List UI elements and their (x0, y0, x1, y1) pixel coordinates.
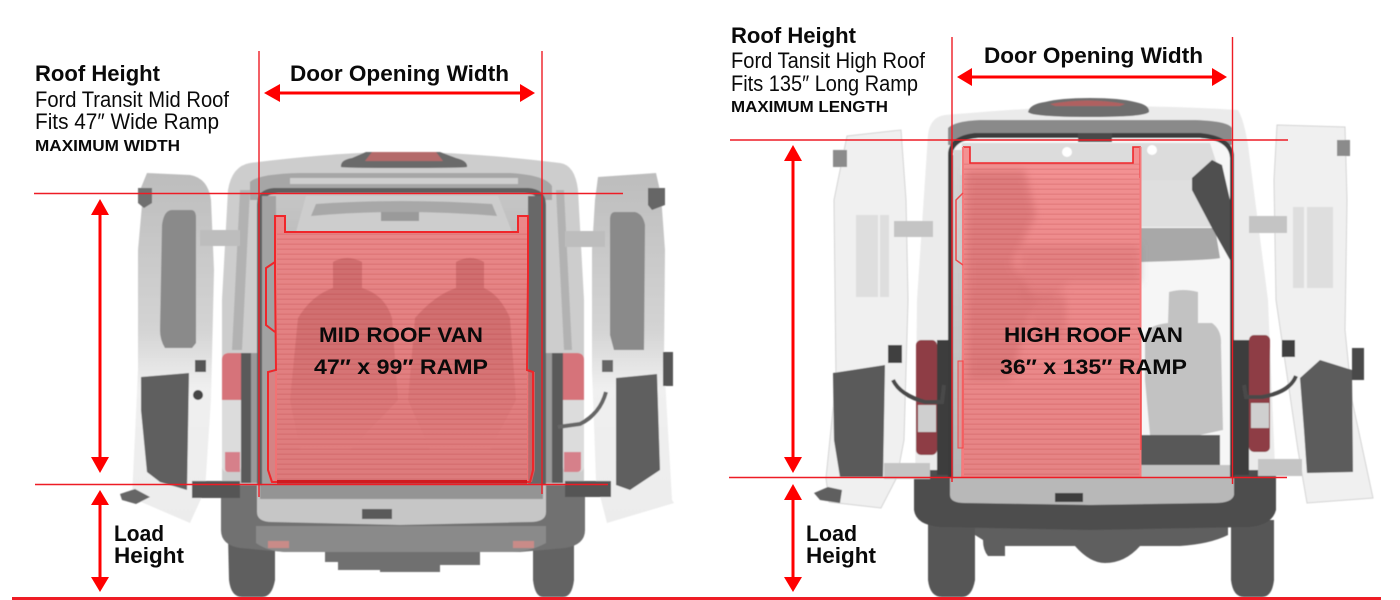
brake light (1028, 98, 1149, 117)
left tail light (916, 340, 937, 455)
left lens lower (225, 452, 240, 472)
body side stripe right (556, 190, 572, 350)
rear shelf (296, 196, 512, 232)
right door latch (648, 188, 665, 210)
load height guide (729, 476, 1287, 478)
door right guide (541, 51, 543, 494)
text: ramp fit: Fits 135″ Long Ramp (731, 71, 918, 96)
right lens white (1251, 403, 1269, 428)
left hinge bottom (192, 481, 240, 498)
heading: door opening width: Door Opening Width (984, 43, 1203, 68)
left door step (120, 489, 150, 504)
ceiling (960, 143, 1222, 180)
right tail light (563, 353, 584, 472)
heading: door opening width: Door Opening Width (290, 61, 509, 86)
sill plate (950, 478, 1234, 505)
left door (132, 173, 214, 523)
brake lens (1050, 100, 1125, 106)
roof height guide (730, 139, 1288, 141)
heading: roof height: Roof Height (731, 23, 857, 48)
left door lower panel (141, 373, 189, 490)
right door (1274, 125, 1373, 503)
right door window (610, 212, 645, 350)
roof height guide (34, 192, 623, 194)
left seam light (251, 353, 257, 483)
right hinge bottom (1258, 459, 1302, 476)
rear bumper (221, 485, 585, 552)
left hinge bottom (884, 463, 930, 479)
text: van model: Ford Tansit High Roof (731, 48, 926, 73)
passenger seat (1145, 290, 1223, 435)
interior backing (262, 193, 541, 485)
license light (362, 509, 392, 519)
right door handle (1352, 348, 1364, 380)
door frame band (250, 173, 552, 200)
label: load height: Load (806, 521, 857, 546)
left strap (893, 380, 944, 402)
brake lens (365, 152, 443, 161)
text: maximum length: MAXIMUM LENGTH (731, 99, 888, 116)
door frame band (948, 120, 1232, 145)
ceiling light 1 (1062, 147, 1072, 157)
left door panels (856, 215, 889, 297)
upper-left shadow (966, 170, 1036, 380)
door left guide (951, 37, 953, 482)
reflector right (513, 541, 534, 548)
label: ramp size: 36″ x 135″ RAMP (1000, 355, 1187, 379)
left rail (958, 361, 963, 448)
label: mid roof van: MID ROOF VAN (319, 323, 483, 347)
right door handle (663, 352, 673, 386)
right strap (1244, 376, 1296, 397)
arrow: roof height (784, 145, 802, 473)
arrow: door opening width (264, 84, 535, 102)
ceiling light 2 (1147, 145, 1157, 155)
right wheel (1231, 520, 1274, 597)
right seam (1234, 340, 1249, 475)
label: load height: Height (806, 543, 877, 568)
right hinge top (565, 231, 605, 247)
vents (381, 212, 419, 221)
label: load height: Load (114, 521, 164, 546)
ramp left edge (962, 147, 964, 477)
left wheel (228, 535, 275, 597)
frame highlight (290, 178, 518, 184)
underbody (975, 525, 1228, 563)
panel: high roof van diagram (729, 23, 1373, 597)
left door latch (138, 188, 152, 208)
cab floor (1140, 435, 1220, 465)
right door lower panel (1300, 360, 1353, 473)
van body (915, 106, 1276, 490)
interior left backing (953, 150, 1140, 478)
left door strap mount (193, 390, 203, 400)
door opening (948, 133, 1234, 478)
left hinge top (894, 221, 933, 237)
right pillar shadow (528, 196, 542, 484)
right door switch (602, 360, 613, 372)
right lens lower (564, 452, 581, 472)
right wheel (533, 535, 574, 597)
text: maximum width: MAXIMUM WIDTH (35, 138, 180, 155)
door right guide (1232, 37, 1234, 484)
ramp slats (963, 163, 1140, 475)
right dark seam (552, 353, 563, 483)
right hinge bottom (565, 481, 611, 497)
left door window (160, 210, 196, 348)
left wheel (928, 520, 975, 597)
right tail light (1249, 335, 1270, 452)
right door panels (1293, 207, 1333, 288)
guide lines: door opening and heights (34, 51, 623, 497)
right hinge top (1249, 216, 1287, 233)
body side stripe left (232, 190, 250, 350)
shadows behind ramp (966, 170, 1140, 380)
dark cabinet (1192, 160, 1230, 260)
left door switch (195, 360, 206, 372)
ground line (12, 597, 1381, 600)
ramp bottom edge (277, 480, 527, 484)
left door (826, 130, 908, 508)
label: ramp size: 47″ x 99″ RAMP (314, 355, 488, 379)
left hinge top (200, 230, 240, 246)
headrest shadow (1032, 295, 1066, 340)
label: high roof van: HIGH ROOF VAN (1004, 323, 1183, 347)
ramp panel (275, 216, 528, 482)
ceiling bracket (1078, 133, 1112, 142)
left seat (290, 258, 398, 450)
arrow: load height (784, 484, 802, 592)
load height guide (35, 484, 608, 486)
ramp: high roof (956, 147, 1141, 477)
van body (222, 152, 584, 490)
right seat (408, 258, 516, 450)
door opening (257, 188, 546, 485)
door strap (558, 392, 606, 427)
brake light (341, 152, 467, 168)
text: ramp fit: Fits 47″ Wide Ramp (35, 109, 219, 134)
sill tread (260, 485, 543, 499)
right door switch (1282, 340, 1295, 357)
left dark seam (241, 353, 251, 483)
left pillar (262, 196, 276, 484)
right door (592, 173, 674, 523)
panel: mid roof van diagram (34, 51, 674, 597)
lower step (256, 526, 546, 552)
seats seen through ramp (290, 258, 516, 450)
text: van model: Ford Transit Mid Roof (35, 87, 230, 112)
right lens red (563, 353, 584, 400)
ramp panel (961, 147, 1140, 477)
left door latch (833, 150, 847, 167)
left tail light (222, 353, 241, 472)
door left guide (258, 51, 260, 497)
left seam (937, 340, 948, 475)
load floor (1140, 465, 1230, 478)
ramp right edge (1140, 147, 1142, 477)
left door step (814, 487, 842, 503)
hitch (325, 550, 480, 572)
right seam light (546, 353, 552, 483)
right door latch (1337, 140, 1350, 156)
right door lower panel (616, 374, 660, 490)
mid band shadow (1020, 245, 1140, 300)
arrow: door opening width (957, 68, 1227, 86)
ramp: mid roof (266, 216, 535, 484)
arrow: load height (91, 490, 109, 592)
rear compartment (1140, 228, 1220, 262)
rear bumper (914, 470, 1276, 530)
guide lines: door opening and heights (729, 37, 1288, 484)
left pillar (948, 155, 953, 478)
ramp outline (963, 147, 1140, 178)
rear wall (1140, 180, 1218, 227)
reflector left (268, 541, 289, 548)
heading: roof height: Roof Height (35, 61, 161, 86)
ramp outline (268, 216, 533, 482)
shelf shadow (311, 201, 497, 216)
interior (952, 138, 1230, 478)
right pillar (1230, 155, 1234, 478)
ramp handle (956, 193, 963, 265)
left door switch (888, 345, 902, 363)
ramp handle (266, 262, 275, 332)
left door lower panel (833, 365, 885, 477)
illustration: mid roof van rear view (120, 152, 674, 597)
sill plate (257, 485, 546, 525)
right rail (1140, 361, 1142, 450)
left lens red (222, 353, 241, 400)
license light (1055, 493, 1083, 502)
arrow: roof height (91, 199, 109, 473)
label: load height: Height (114, 543, 185, 568)
ramp side rails (267, 372, 535, 482)
illustration: high roof van rear view (814, 98, 1373, 597)
left lens white (918, 405, 936, 432)
ramp slats (277, 232, 527, 482)
